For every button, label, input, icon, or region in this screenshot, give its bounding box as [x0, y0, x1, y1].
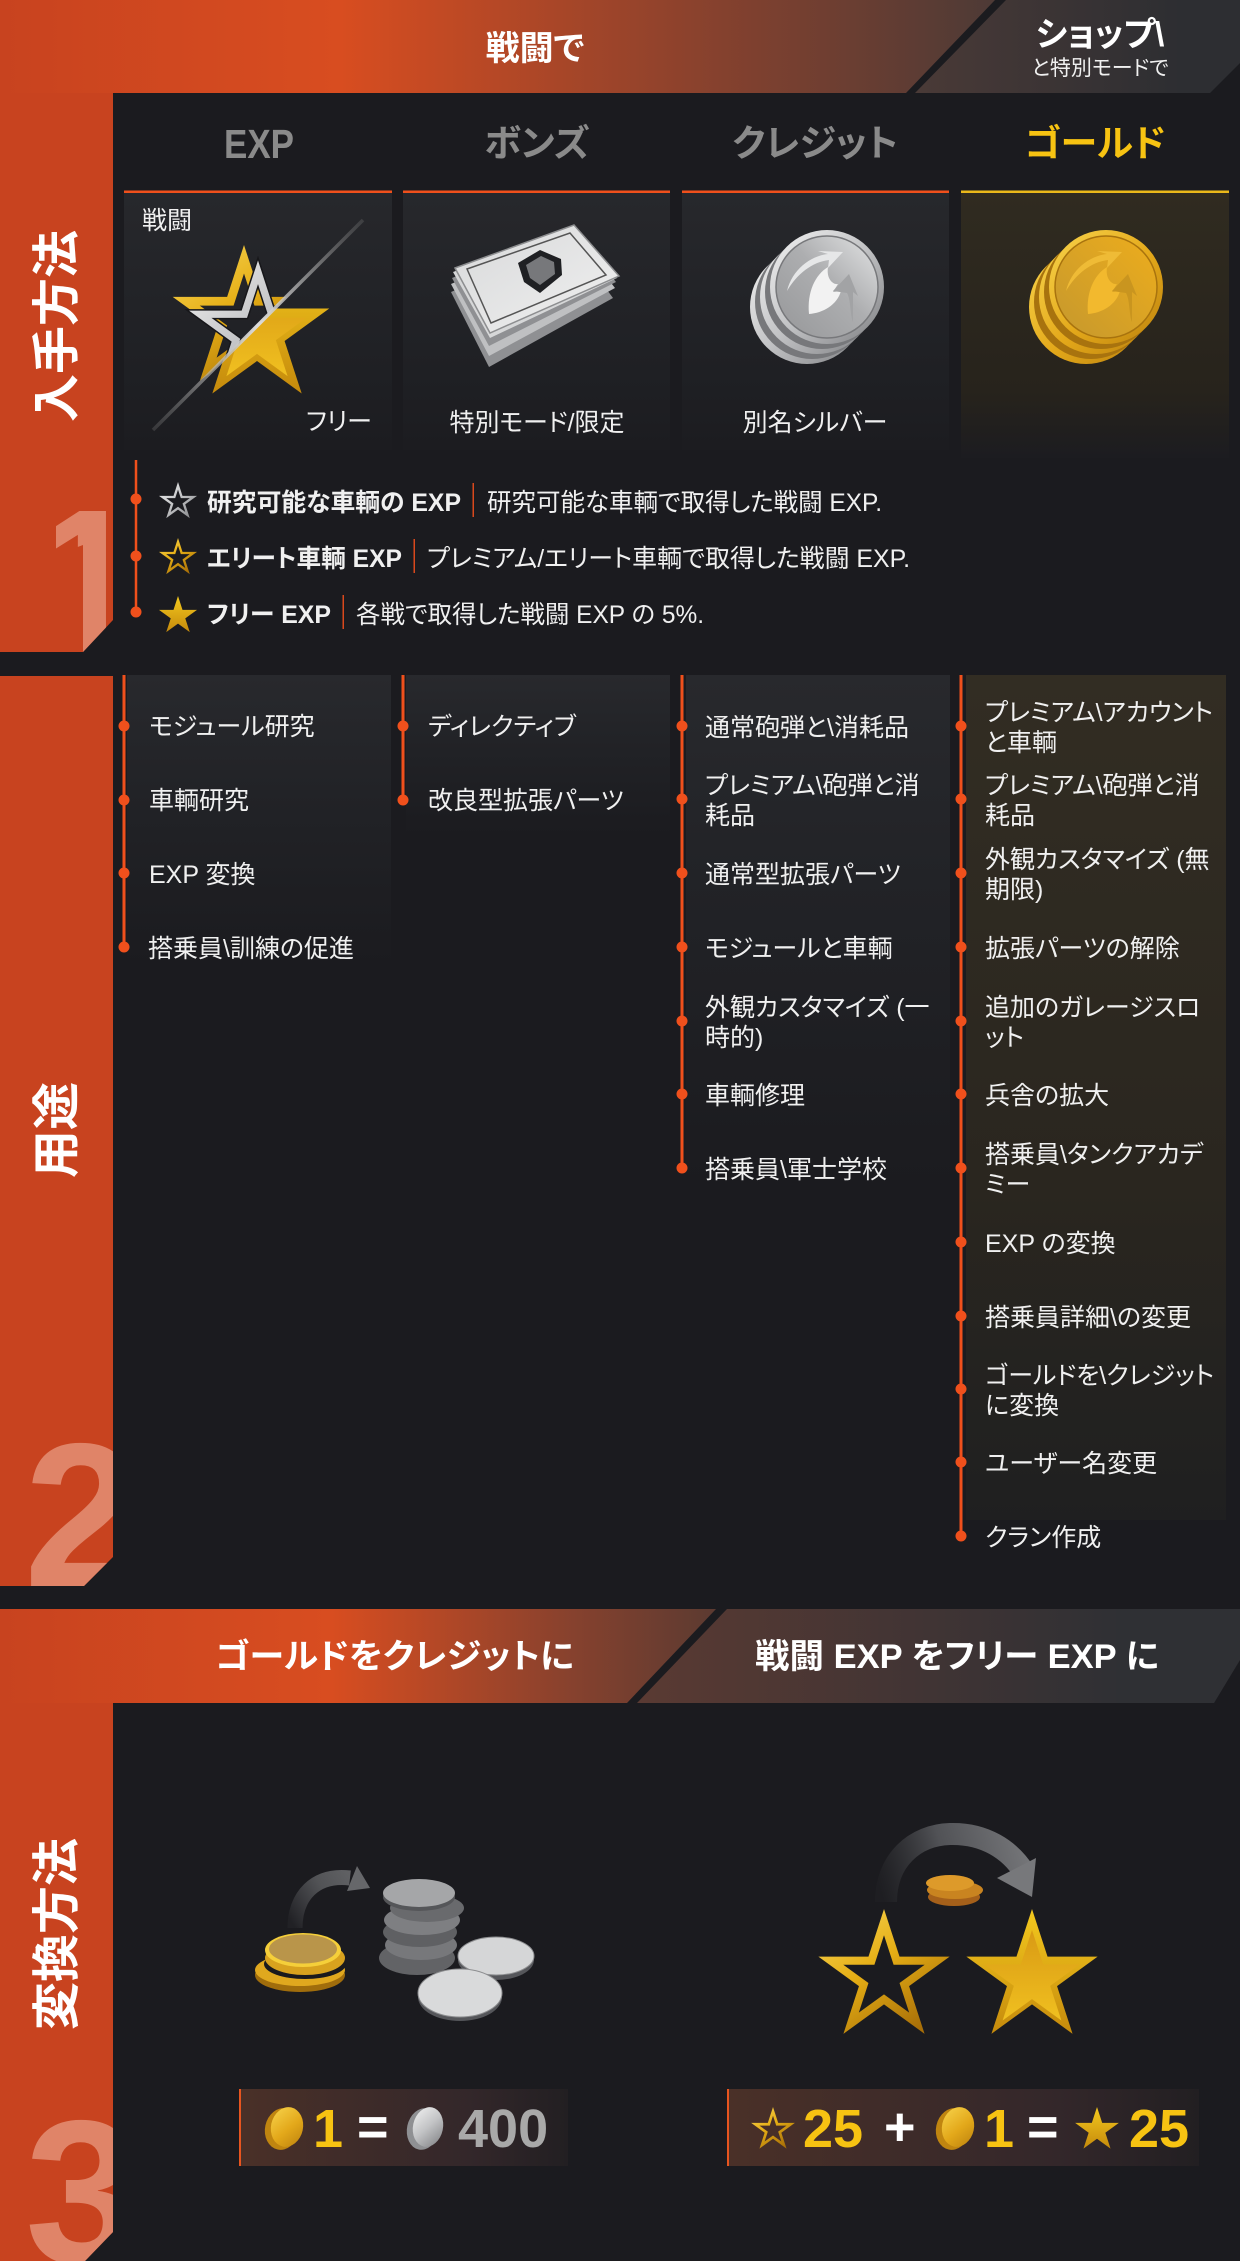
- silver coin stack: [379, 1879, 464, 1975]
- column: bond uses: ディレクティブ: [428, 713, 577, 741]
- icon: silver coins: [750, 230, 884, 364]
- column: credit uses: 通常型拡張パーツ: [705, 861, 901, 889]
- band: battle EXP to free EXP: [637, 1609, 1240, 1703]
- legend item: elite EXP: [130, 538, 910, 574]
- icon: gold coin: [932, 2104, 978, 2153]
- column: gold uses: プレミアム\アカウント: [985, 699, 1213, 727]
- numeral 1: 1: [30, 467, 144, 696]
- orange side bar: [0, 93, 113, 652]
- legend: EXP types: [130, 460, 910, 632]
- star: outline: [818, 1909, 950, 2034]
- column: EXP uses: モジュール研究: [149, 713, 315, 741]
- icon: gold coins: [1029, 230, 1163, 364]
- formula: gold to credits: [239, 2089, 568, 2166]
- column: credit uses: 時的): [705, 1024, 763, 1052]
- numeral 2: 2: [24, 1401, 138, 1630]
- column: gold uses: ゴールドを\クレジット: [985, 1362, 1214, 1390]
- vertical heading: how to obtain: 入手方法: [31, 230, 84, 422]
- formula: gold to credits: 400: [458, 2099, 548, 2159]
- legend item: elite EXP: エリート車輌 EXP: [207, 545, 402, 573]
- orange side bar: [0, 676, 113, 1586]
- star: filled: [966, 1909, 1098, 2034]
- column: EXP uses: 車輌研究: [149, 787, 249, 815]
- column headings: EXP: [224, 121, 294, 167]
- formula: battle EXP to free EXP: [727, 2089, 1199, 2166]
- column: gold uses: 追加のガレージスロ: [985, 994, 1200, 1022]
- column: bond uses: 改良型拡張パーツ: [428, 787, 624, 815]
- column: gold uses: 兵舎の拡大: [985, 1082, 1109, 1110]
- column: gold uses: と車輌: [985, 729, 1057, 757]
- column: gold uses: EXP の変換: [985, 1230, 1116, 1258]
- card: credits: [682, 190, 949, 450]
- band: in battle: [0, 0, 995, 93]
- formula: battle EXP to free EXP: 25: [803, 2099, 863, 2159]
- card: EXP: [124, 190, 392, 450]
- column: credit uses: 車輌修理: [705, 1082, 805, 1110]
- label: also known as silver: 別名シルバー: [743, 409, 887, 437]
- legend item: research EXP: 研究可能な車輌で取得した戦闘 EXP.: [487, 489, 882, 517]
- band: shop and special modes: ショップ\: [1036, 16, 1165, 54]
- legend item: free EXP: [130, 595, 704, 632]
- band: gold to credits: ゴールドをクレジットに: [215, 1637, 574, 1676]
- band: gold to credits: [0, 1609, 716, 1703]
- column: gold uses: ット: [985, 1024, 1024, 1052]
- formula: gold to credits: 1: [313, 2099, 343, 2159]
- icon: banknotes: [451, 225, 619, 367]
- column: gold uses: ユーザー名変更: [985, 1450, 1157, 1478]
- column: gold uses: 外観カスタマイズ (無: [985, 846, 1210, 874]
- legend item: research EXP: [130, 482, 882, 518]
- column: gold uses: [956, 675, 1226, 1552]
- gold coin stack: [255, 1933, 346, 1992]
- vertical heading: uses: 用途: [31, 1082, 84, 1178]
- arrow: [295, 1866, 370, 1928]
- column: gold uses: 期限): [985, 876, 1043, 904]
- loose silver coin: [418, 1969, 502, 2021]
- legend item: research EXP: 研究可能な車輌の EXP: [207, 489, 461, 517]
- column: EXP uses: [118, 675, 391, 965]
- icon: split star: [153, 220, 363, 430]
- column headings: クレジット: [732, 123, 898, 164]
- label: free: フリー: [306, 408, 372, 436]
- formula: gold to credits: =: [357, 2097, 389, 2157]
- legend item: elite EXP: プレミアム/エリート車輌で取得した戦闘 EXP.: [427, 545, 910, 573]
- section 3 panel: conversion: [0, 1609, 1240, 2261]
- column: EXP uses: EXP 変換: [149, 861, 256, 889]
- arrow: [886, 1834, 1036, 1902]
- vertical heading: how to convert: 変換方法: [31, 1838, 84, 2030]
- column: gold uses: 拡張パーツの解除: [985, 935, 1180, 963]
- column: gold uses: 搭乗員\タンクアカデ: [985, 1141, 1203, 1169]
- column: EXP uses: 搭乗員\訓練の促進: [148, 935, 354, 963]
- column: bond uses: [398, 675, 670, 835]
- section 2 panel: uses: [0, 675, 1226, 1630]
- icon: outline star: [751, 2107, 795, 2149]
- column: gold uses: に変換: [985, 1392, 1059, 1420]
- legend item: free EXP: フリー EXP: [207, 601, 331, 629]
- formula: battle EXP to free EXP: =: [1027, 2097, 1059, 2157]
- icon: silver coin: [403, 2104, 447, 2153]
- column: gold uses: クラン作成: [985, 1524, 1101, 1552]
- formula: battle EXP to free EXP: 25: [1129, 2099, 1189, 2159]
- column: credit uses: プレミアム\砲弾と消: [705, 772, 920, 800]
- label: battle: 戦闘: [142, 207, 192, 235]
- coin: [926, 1875, 983, 1906]
- band: shop and special modes: [915, 0, 1240, 93]
- section 1 panel: how to obtain: [0, 0, 1240, 696]
- column: credit uses: [676, 675, 950, 1185]
- illustration: battle EXP to free EXP: [818, 1834, 1098, 2034]
- column headings: ゴールド: [1024, 122, 1166, 164]
- icon: filled star: [1075, 2107, 1119, 2149]
- column headings: ボンズ: [484, 123, 590, 164]
- column: credit uses: 外観カスタマイズ (一: [705, 994, 930, 1022]
- column headings: [224, 121, 1166, 167]
- column: gold uses: プレミアム\砲弾と消: [985, 772, 1200, 800]
- column: credit uses: 搭乗員\軍士学校: [705, 1156, 887, 1184]
- band: battle EXP to free EXP: 戦闘 EXP をフリー EXP に: [755, 1638, 1159, 1676]
- formula: battle EXP to free EXP: +: [884, 2097, 916, 2157]
- band: shop and special modes: と特別モードで: [1031, 57, 1169, 80]
- illustration: gold coins to silver coins: [255, 1866, 534, 2021]
- legend item: free EXP: 各戦で取得した戦闘 EXP の 5%.: [356, 601, 704, 629]
- column: credit uses: モジュールと車輌: [705, 935, 893, 963]
- orange side bar: [0, 1703, 113, 2261]
- formula: battle EXP to free EXP: 1: [984, 2099, 1014, 2159]
- column: credit uses: 通常砲弾と\消耗品: [705, 714, 909, 742]
- icon: gold coin: [261, 2104, 307, 2153]
- label: special mode / limited: 特別モード/限定: [449, 409, 625, 437]
- column: gold uses: ミー: [985, 1171, 1030, 1199]
- card: gold: [961, 190, 1229, 458]
- column: gold uses: 搭乗員詳細\の変更: [985, 1304, 1191, 1332]
- card: bonds: [403, 190, 670, 450]
- column: credit uses: 耗品: [705, 802, 755, 830]
- column: gold uses: 耗品: [985, 802, 1035, 830]
- loose silver coin: [458, 1937, 534, 1980]
- band: in battle: 戦闘で: [486, 30, 584, 68]
